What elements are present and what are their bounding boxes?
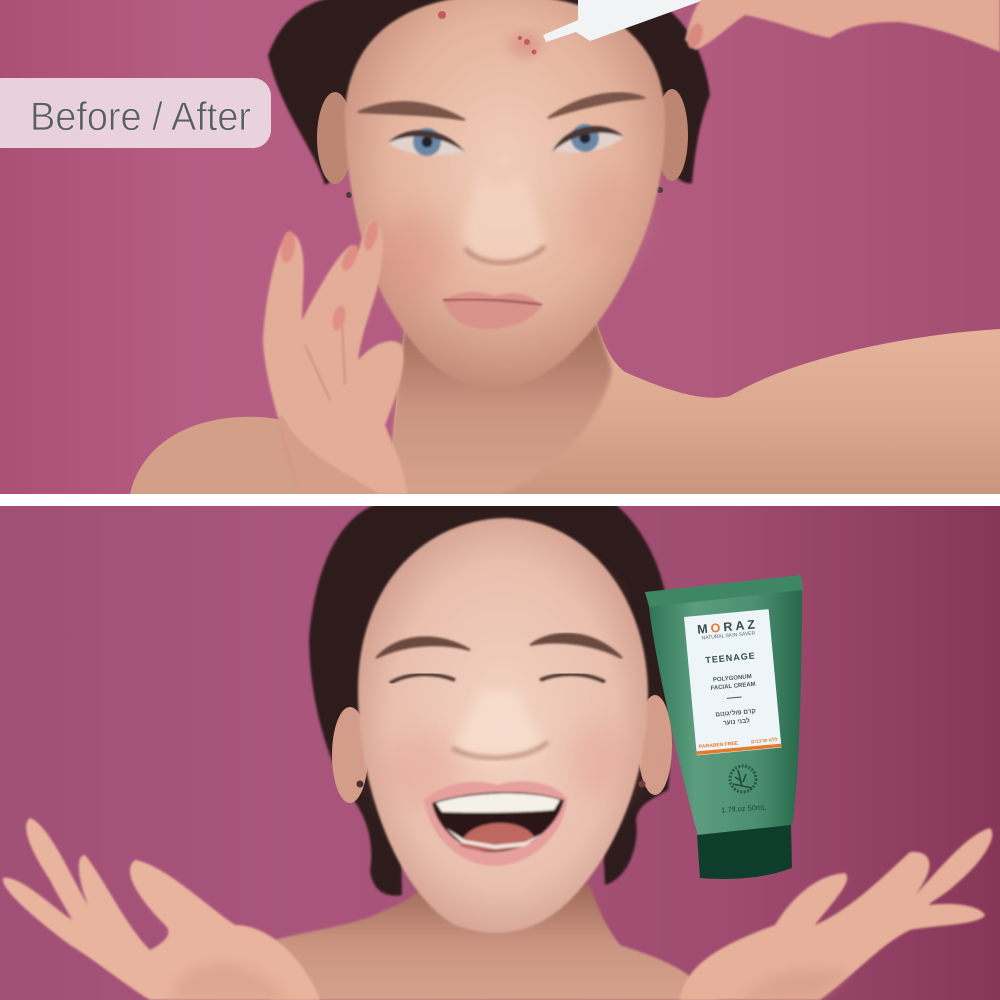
fingernails [279,220,381,332]
before / after label [0,78,271,148]
face: before [345,0,665,388]
volume text: 1.7fl.oz 50mL [721,802,767,815]
panel: before photo [0,0,1000,494]
tube crimp [645,575,803,610]
icon: polygonum seal [730,766,756,792]
cheek blush: after [389,728,642,804]
left hand: after [3,818,320,1000]
hair: before [268,0,710,185]
before / after label: Before / After [30,95,251,139]
laughing mouth: after [424,781,567,866]
applicator tube: before [543,0,704,42]
nose: after [454,692,541,756]
nose: before [462,182,546,262]
brand: MORAZ [697,617,759,637]
panel: after photo [0,500,1000,1000]
hebrew description: קרם פוליגונום [715,707,756,719]
tube cap [697,825,792,879]
hand on cheek: before [263,220,407,494]
hand at top right: before [684,0,1000,52]
product: tube of cream [645,575,803,879]
tube label: ללא פרבנים [751,736,778,745]
product name: TEENAGE [705,651,756,665]
tube label: NATURAL SKIN SAVER [701,630,756,641]
hair: after [309,500,671,896]
eyes: before [388,124,624,156]
paraben free note: PARABEN FREE [699,741,739,750]
ears: before [317,89,688,198]
neck and shoulders: after [270,885,720,1000]
lips: before [443,292,542,329]
ears: after [332,695,672,803]
cheek blush and acne: before [384,11,625,290]
tube label: FACIAL CREAM [710,682,756,692]
face: after [358,518,648,933]
product description: POLYGONUM [713,674,752,684]
tube label [684,609,781,755]
right hand: after [680,828,992,1000]
eyebrows: before [358,93,645,120]
closed eyes: after [390,674,605,683]
eyebrows: after [376,634,622,658]
tube body [649,590,802,836]
tube label: לבני נוער [723,716,750,727]
shoulders and neck: before [130,320,1000,494]
